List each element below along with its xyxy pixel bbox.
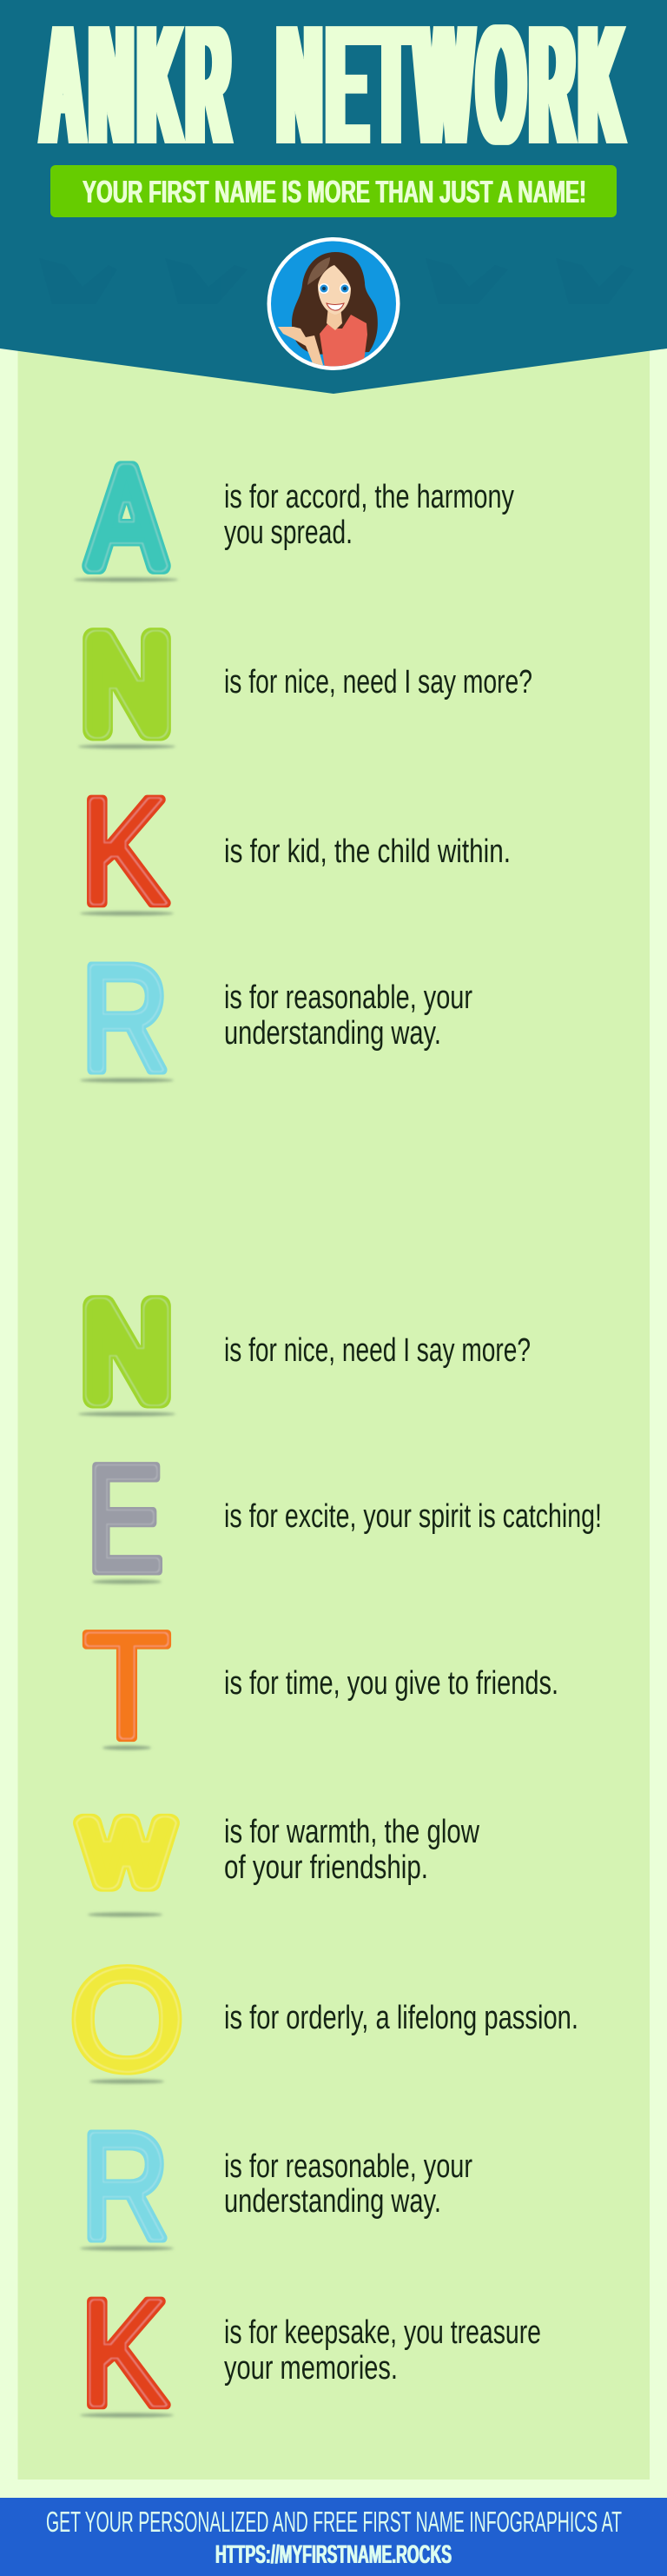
row 9: letter O: [69, 1938, 578, 2100]
footer url: HTTPS://MYFIRSTNAME.ROCKS: [215, 2540, 452, 2569]
text: R meaning: understanding way.: [224, 1015, 441, 1052]
text: R meaning: is for reasonable, your: [224, 2148, 472, 2185]
text: K meaning: is for kid, the child within.: [224, 833, 511, 870]
text: A meaning: you spread.: [224, 515, 353, 551]
text: K meaning: [224, 2314, 541, 2387]
text: W meaning: is for warmth, the glow: [224, 1814, 479, 1850]
row 6: letter E: [86, 1435, 602, 1604]
content panel: [17, 330, 650, 2480]
row 7: letter T: [83, 1601, 558, 1769]
row 8: letter W: [83, 1805, 479, 1917]
portrait: smiling woman: [267, 237, 400, 370]
subtitle bar: [50, 165, 617, 217]
letter T icon: T: [83, 1601, 170, 1769]
letter E icon: E: [86, 1435, 164, 1604]
text: R meaning: [224, 2148, 472, 2220]
text: R meaning: is for reasonable, your: [224, 979, 472, 1016]
letter R icon: R: [81, 2102, 169, 2270]
row 2: letter N: [78, 611, 532, 759]
header banner: [0, 0, 667, 394]
text: K meaning: your memories.: [224, 2350, 398, 2387]
row 11: letter K: [80, 2268, 541, 2437]
letter K icon: K: [80, 2268, 168, 2437]
text: A meaning: [224, 479, 514, 551]
text: T meaning: is for time, you give to friends.: [224, 1665, 558, 1702]
text: R meaning: [224, 979, 472, 1052]
letter N icon: N: [83, 1278, 171, 1426]
letter A icon: A: [89, 440, 164, 596]
footer: [0, 2498, 667, 2576]
row 1: letter A: [74, 440, 514, 596]
text: N meaning: is for nice, need I say more?: [224, 1332, 531, 1369]
letter O icon: O: [69, 1938, 185, 2100]
text: W meaning: of your friendship.: [224, 1849, 428, 1886]
row 4: letter R: [80, 934, 472, 1102]
text: W meaning: [224, 1814, 479, 1886]
text: K meaning: is for keepsake, you treasure: [224, 2314, 541, 2351]
letter N icon: N: [83, 611, 171, 759]
letter R icon: R: [81, 934, 169, 1102]
row 3: letter K: [80, 767, 511, 935]
text: A meaning: is for accord, the harmony: [224, 479, 514, 515]
text: N meaning: is for nice, need I say more?: [224, 664, 532, 700]
row 10: letter R: [80, 2102, 472, 2270]
text: R meaning: understanding way.: [224, 2183, 441, 2220]
letter W icon: W: [83, 1805, 170, 1901]
row 5: letter N: [78, 1278, 531, 1426]
letter K icon: K: [80, 767, 168, 935]
